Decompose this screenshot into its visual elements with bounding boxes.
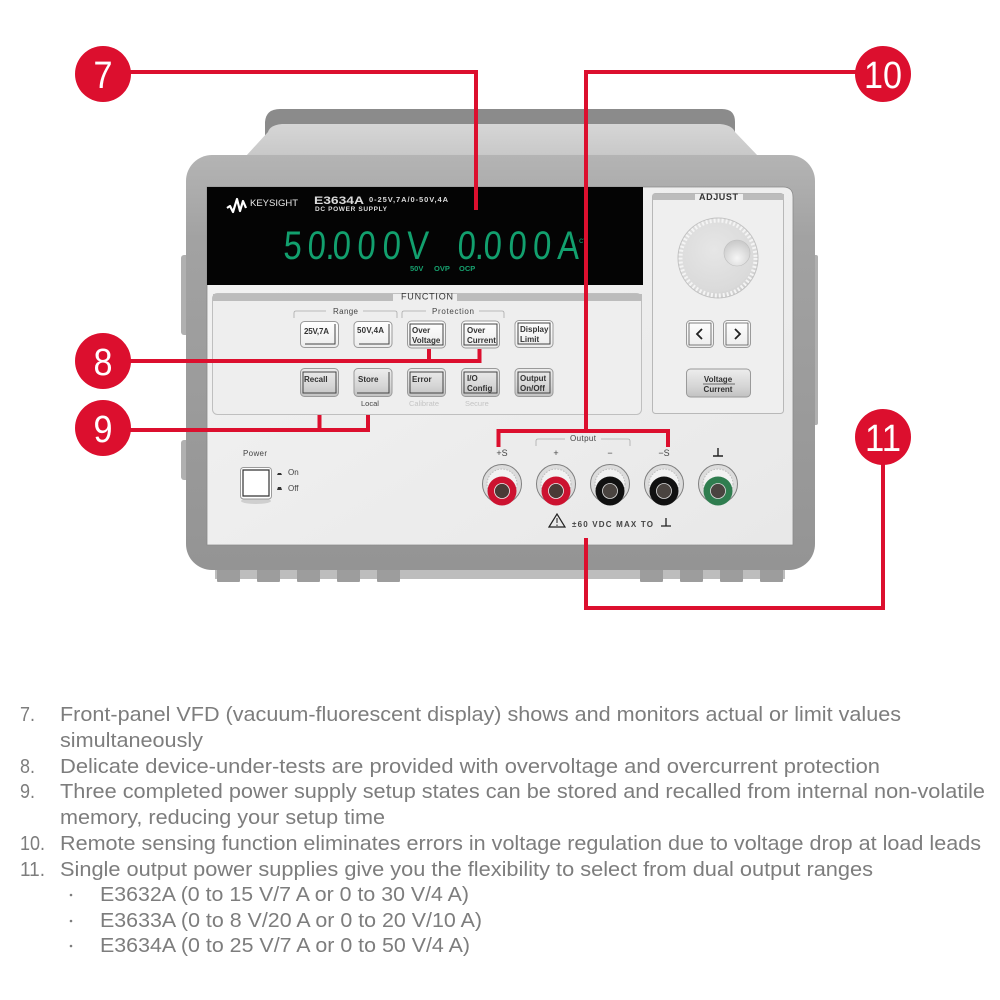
callout 11: 11 [865, 418, 901, 460]
button: display limit: Display [520, 325, 549, 334]
button: over voltage: Voltage [412, 336, 441, 345]
button: voltage current: Current [704, 385, 733, 394]
sub-item E3632A: E3632A (0 to 15 V/7 A or 0 to 30 V/4 A) [100, 884, 469, 906]
terminal labels: − [607, 448, 613, 458]
terminal: − [590, 464, 630, 506]
terminal: −s [644, 464, 684, 506]
callout 7: 7 [94, 55, 112, 97]
callout 10 [498, 46, 911, 447]
button: output on/off: On/Off [520, 384, 545, 393]
icon: keysight logo [227, 198, 298, 212]
button: over current [462, 321, 500, 348]
button: output on/off: Output [520, 374, 547, 383]
button: display limit: Limit [520, 335, 539, 344]
item 10: Remote sensing function eliminates errors in voltage regulation due to voltage drop at load leads [60, 833, 981, 855]
range group label: Range [333, 307, 359, 316]
model label: E3634A [314, 195, 364, 207]
item 9: Three completed power supply setup states can be stored and recalled from internal non-volatile [60, 781, 985, 803]
item 7: 7. [20, 704, 35, 726]
callout 7 [75, 46, 476, 210]
warning label: ±60 VDC MAX TO [572, 520, 653, 529]
button: display limit [515, 320, 553, 348]
terminal labels: +S [496, 448, 508, 458]
button: io config [462, 368, 500, 396]
annunciators: OCP [459, 264, 475, 273]
annunciators [410, 264, 475, 273]
button: left arrow [686, 320, 714, 348]
protection group label [402, 307, 504, 318]
callout 10: 10 [864, 55, 902, 97]
item 9: 9. [20, 781, 35, 803]
sub-item E3633A: E3633A (0 to 8 V/20 A or 0 to 20 V/10 A) [100, 910, 482, 932]
model label: DC POWER SUPPLY [315, 206, 388, 213]
item 9: memory, reducing your setup time [60, 807, 385, 829]
item 9 [20, 781, 985, 829]
side grips [181, 255, 818, 480]
power button [240, 468, 272, 504]
output terminals [482, 434, 738, 529]
button: over voltage: Over [412, 326, 430, 335]
callout 9 [75, 400, 368, 456]
callout 9: 9 [94, 409, 112, 451]
button: recall: Recall [304, 375, 328, 384]
annunciators: OVP [434, 264, 450, 273]
item 7: simultaneously [60, 730, 203, 752]
power supply unit [181, 109, 818, 582]
item 11: 11. [20, 859, 45, 881]
button: right arrow [724, 320, 750, 348]
on off labels [277, 468, 299, 493]
button: error: Error [412, 375, 432, 384]
panel: display [207, 187, 643, 285]
item 8: 8. [20, 756, 35, 778]
callout 8: 8 [94, 342, 112, 384]
power switch [240, 449, 299, 504]
button: over current: Over [467, 326, 485, 335]
protection group label: Protection [432, 307, 474, 316]
ground symbol [713, 448, 723, 456]
cv indicator: CV [579, 239, 587, 245]
button: io config: I/O [467, 374, 478, 383]
terminal: ground [698, 464, 738, 506]
heading: function: FUNCTION [401, 292, 453, 302]
output bracket: Output [570, 434, 597, 443]
range group label [294, 307, 397, 318]
item 11: Single output power supplies give you the flexibility to select from dual output ranges [60, 859, 873, 881]
button: error [408, 368, 446, 396]
icon: rotary knob [678, 218, 758, 298]
button: over voltage [408, 321, 446, 348]
item 10: 10. [20, 833, 45, 855]
button: 25V,7A [300, 322, 338, 348]
button: 25V,7A: 25V,7A [304, 327, 329, 336]
button: store: Store [358, 375, 379, 384]
model label: 0-25V,7A/0-50V,4A [369, 195, 449, 204]
callout 11 [586, 409, 911, 608]
heading: adjust: ADJUST [699, 192, 738, 202]
item 8: Delicate device-under-tests are provided with overvoltage and overcurrent protection [60, 756, 880, 778]
secondary key labels: Secure [465, 399, 489, 408]
annunciators: 50V [410, 264, 423, 273]
button: recall [300, 368, 338, 396]
button: output on/off [515, 368, 553, 396]
front face [207, 187, 793, 545]
text block: feature list [20, 704, 985, 957]
warning label [549, 514, 671, 529]
bottom feet [215, 566, 785, 582]
button: io config: Config [467, 384, 492, 393]
panel: function [212, 292, 642, 414]
callout 8 [75, 333, 480, 389]
terminal labels: −S [658, 448, 670, 458]
terminal labels [496, 448, 670, 458]
button: voltage current [686, 369, 750, 397]
terminal: + [536, 464, 576, 506]
outer bezel [186, 155, 815, 570]
terminal: +s [482, 464, 522, 506]
power label: Power [243, 449, 267, 458]
secondary key labels [361, 399, 489, 408]
item 7 [20, 704, 901, 752]
rear housing lid [246, 109, 758, 156]
button: voltage current: Voltage [704, 375, 733, 384]
button: 50V,4A [354, 322, 392, 348]
model label [314, 195, 449, 213]
button: over current: Current [467, 336, 496, 345]
current readout: 0.000A [457, 223, 581, 268]
voltage readout: 50.000V [283, 223, 430, 268]
terminal labels: + [553, 448, 559, 458]
output bracket [536, 434, 630, 446]
panel: adjust [652, 192, 784, 414]
secondary key labels: Local [361, 399, 379, 408]
on off labels: Off [288, 484, 299, 493]
icon: keysight logo: KEYSIGHT [250, 198, 298, 209]
on off labels: On [288, 468, 299, 477]
button: 50V,4A: 50V,4A [357, 326, 384, 335]
button: store [354, 368, 392, 396]
item 7: Front-panel VFD (vacuum-fluorescent display) shows and monitors actual or limit values [60, 704, 901, 726]
sub-item E3634A: E3634A (0 to 25 V/7 A or 0 to 50 V/4 A) [100, 935, 470, 957]
secondary key labels: Calibrate [409, 399, 439, 408]
